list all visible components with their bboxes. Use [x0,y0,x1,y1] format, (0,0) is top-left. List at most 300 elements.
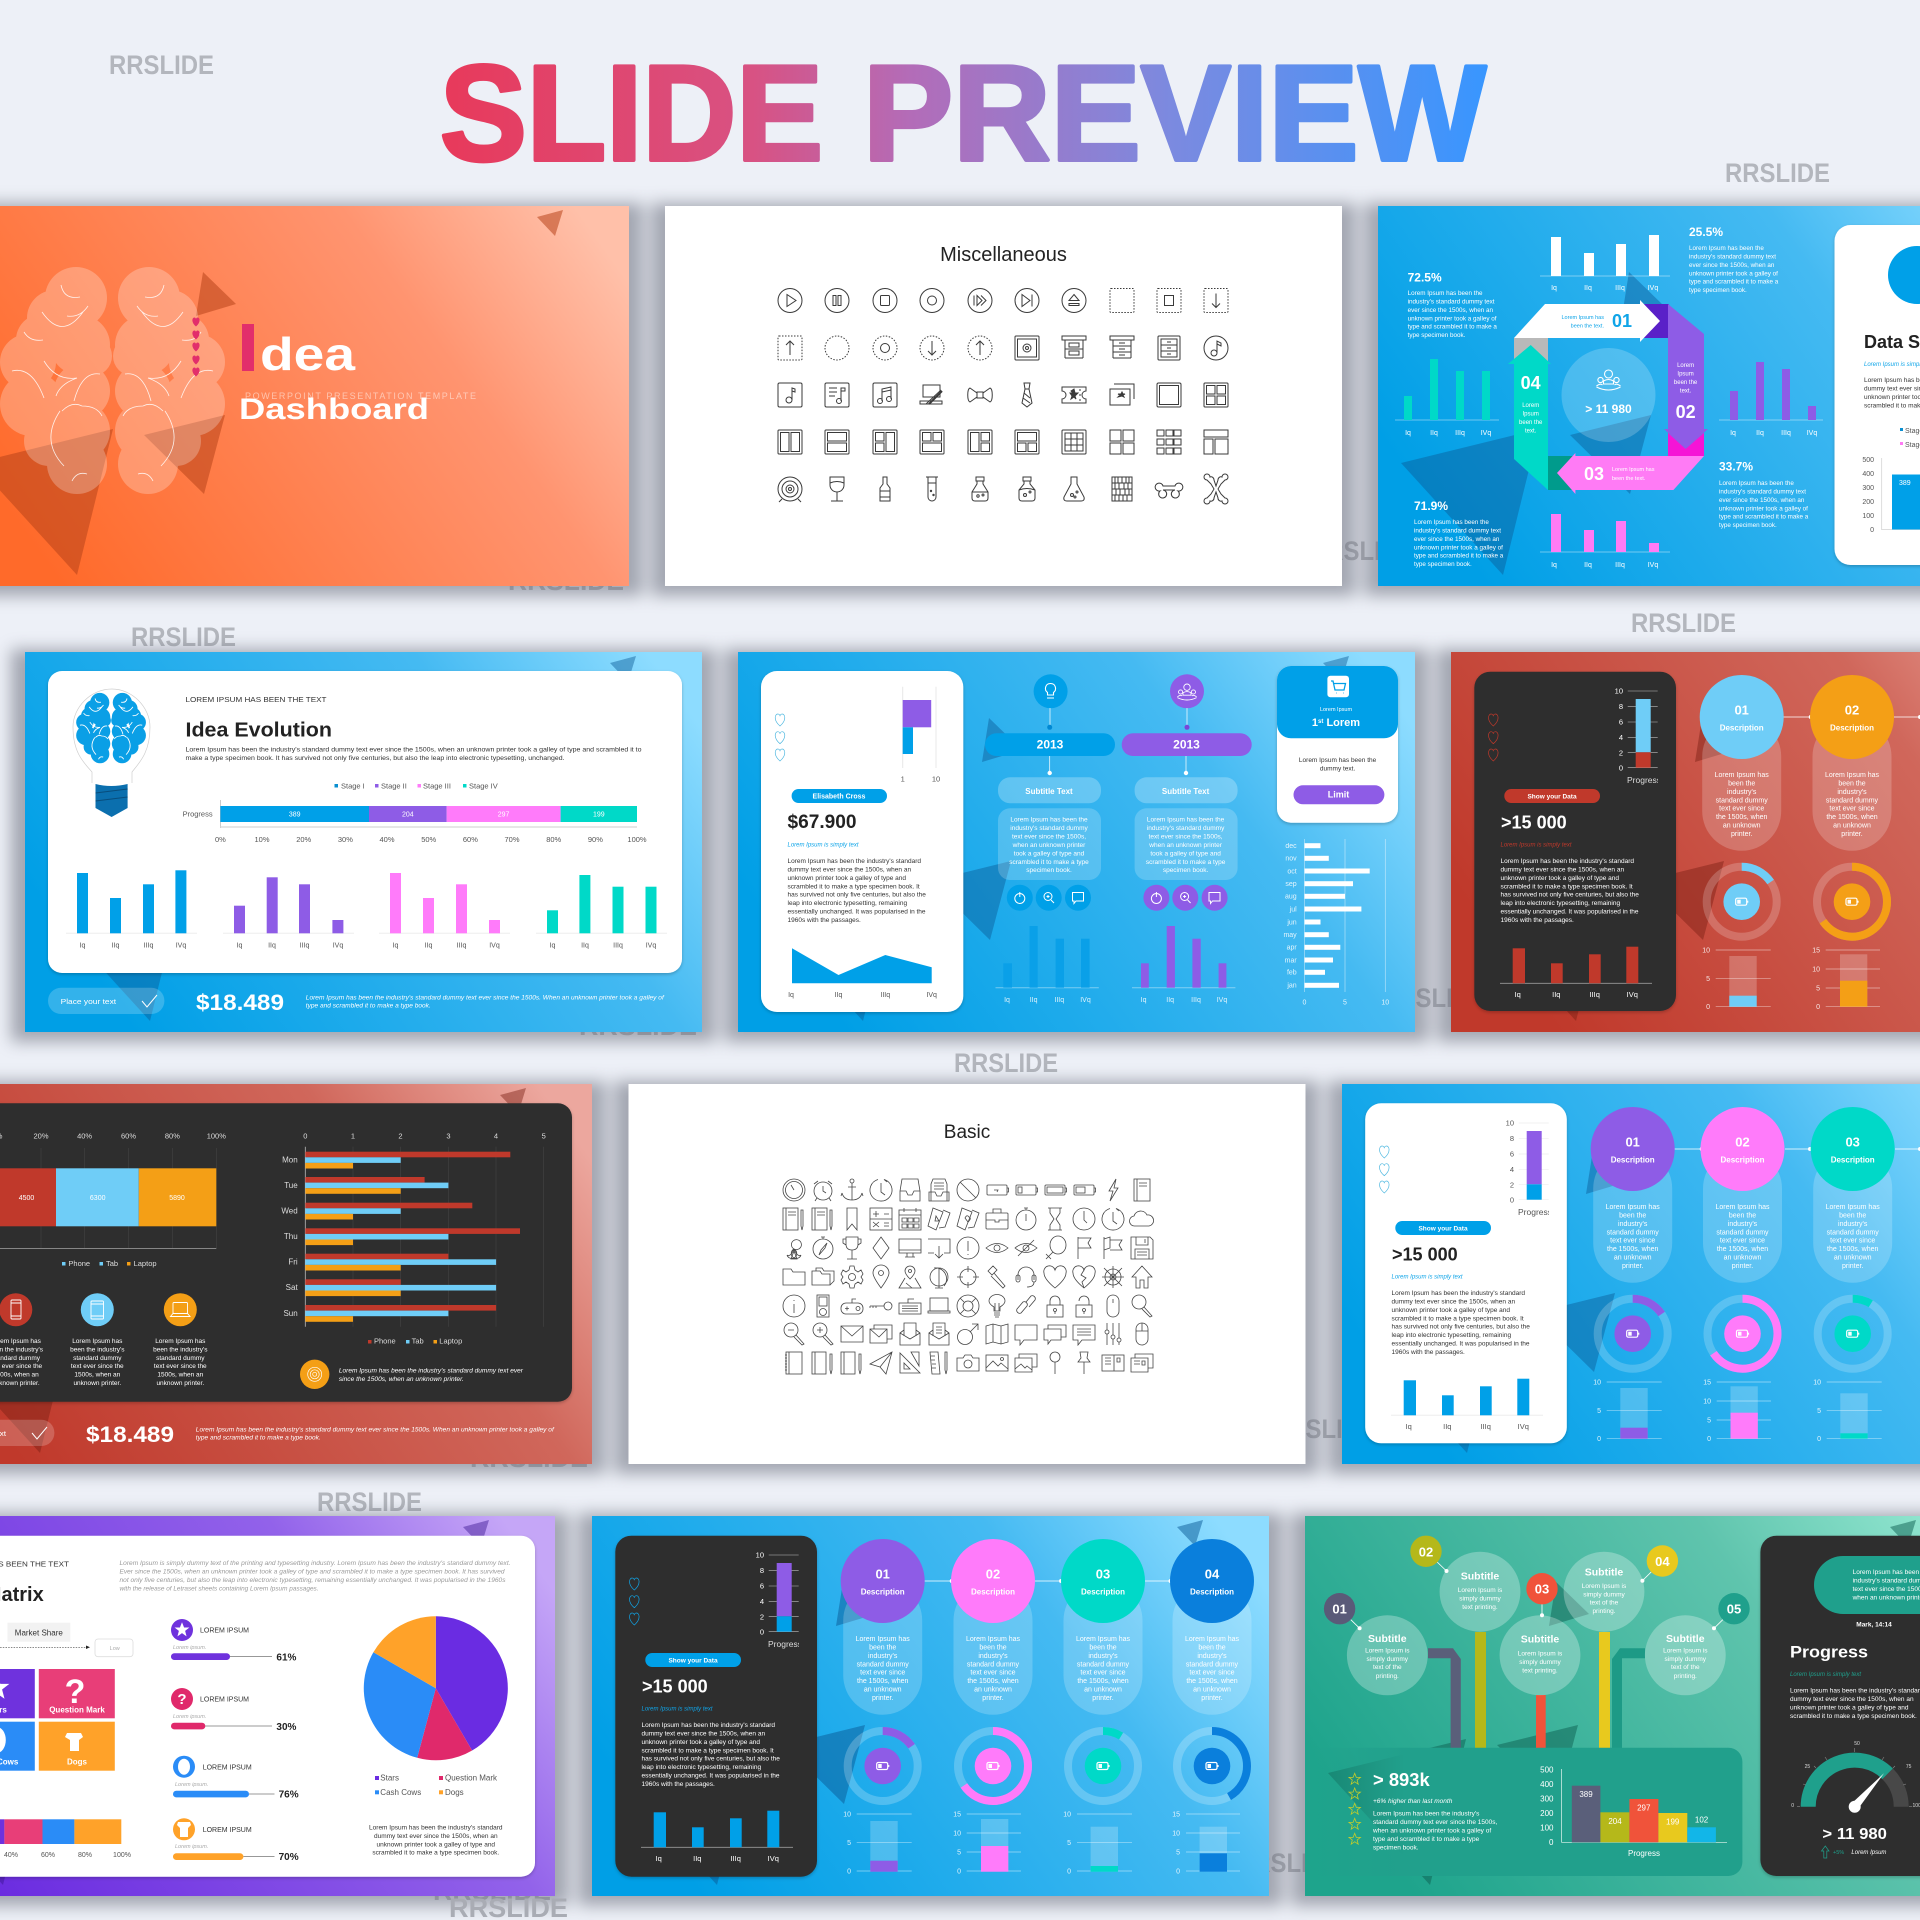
horizontal bar chart: week: Wed [281,1206,298,1216]
progress chart: 4 [760,1597,764,1606]
paragraph: scrambled it to make a type specimen book. It [1500,883,1633,890]
area chart: Iq [788,992,794,999]
step 02: been the [1838,780,1866,787]
bubble 04: simply dummy [1583,1591,1626,1598]
stacked progress bar: 80% [546,835,562,844]
stacked progress bar: 20% [296,835,312,844]
stat: 71.9%: industry's standard dummy text [1414,527,1501,534]
heading: Idea [242,324,356,371]
bar chart: pink [1540,514,1670,569]
bar chart: IVq [768,1854,779,1863]
step 03: 5 [1817,1408,1821,1415]
paragraph: scrambled it to make a type specimen book. It [788,883,920,890]
slide: green progress [1305,1516,1920,1896]
gauge: 0 [1791,1803,1794,1809]
legend: Laptop [134,1259,157,1268]
step 02: printer. [982,1695,1004,1702]
area chart: IIq [835,992,842,999]
bar chart: purple: Iq [1730,430,1736,437]
paragraph: leap into electronic typesetting, remaining [1500,900,1620,907]
arrow 04: text. [1525,428,1537,434]
metric: 76% [173,1756,299,1801]
bubble 03: 03 [1535,1582,1549,1597]
step 03: 10 [1063,1812,1071,1818]
bubble 03 [1500,1573,1580,1695]
bar chart: purple: IIIq [300,942,309,950]
description [186,746,642,762]
metric: 30%: LOREM IPSUM [200,1697,249,1704]
stars [1349,1773,1360,1844]
stacked chart: 4500 [19,1195,34,1202]
bar chart: pink: Iq [393,942,399,950]
stat: 71.9%: Lorem Ipsum has been the [1414,519,1489,526]
panel: dark card [1474,672,1676,1011]
metric: 61%: Lorem ipsum. [173,1645,206,1651]
paragraph: leap into electronic typesetting, remaining [1392,1332,1511,1339]
step 02: 10 [953,1830,961,1838]
bar chart: teal: IIIq [1455,430,1465,437]
paragraph: dummy text ever since the 1500s, when an [1500,866,1624,873]
horizontal bar chart: week: 1 [351,1132,355,1141]
stacked progress bar: 60% [463,835,478,844]
step 03: 5 [1067,1840,1071,1847]
step 02: Lorem Ipsum has [1715,1204,1770,1211]
step 01: an unknown [1614,1255,1652,1262]
pill: place your text: Place your text [61,997,117,1006]
stat: 71.9% [1414,499,1504,568]
progress chart: 4 [1510,1165,1514,1174]
note [339,1368,524,1383]
horizontal bar chart: months: aug [1285,894,1297,901]
step 03: industry's [1088,1653,1118,1660]
horizontal bar chart: months: jan [1286,983,1297,990]
heading: Idea: dea [260,328,355,380]
step 02: 15 [1812,948,1820,954]
metric: 70%: LOREM IPSUM [203,1827,252,1834]
stat: 71.9%: 71.9% [1414,499,1448,513]
subtitle text: POWERPOINT PRESENTATION TEMPLATE [245,391,476,401]
paragraph: dummy text ever since the 1500s, when an [642,1730,765,1737]
bubble 02 [1410,1536,1520,1632]
stacked progress bar: 70% [504,835,520,844]
paragraph: scrambled it to make a type specimen book. [1790,1713,1917,1720]
step 03: standard dummy [1077,1661,1130,1668]
step 01: the 1500s, when [857,1678,908,1685]
connector line [1783,715,1920,719]
paragraph: scrambled it to make a type specimen book. It [1392,1315,1524,1322]
arrow 02 [1644,304,1708,456]
horizontal bar chart: months: jun [1286,919,1297,926]
sub text: Lorem Ipsum is simply text [1500,842,1572,848]
step 02: 10 [1812,966,1820,974]
stat: 72.5%: Lorem Ipsum has been the [1408,290,1483,297]
gauge [1791,1741,1920,1813]
pill: show your data [645,1653,741,1667]
watermarks: RRSLIDE [1271,1414,1376,1444]
step 02: printer. [1732,1263,1753,1270]
stat: 11 980: > 11 980 [1822,1826,1887,1843]
slide: BCG matrix purple [0,1516,555,1896]
step 01: standard dummy [1716,797,1768,804]
step 02: an unknown [1724,1255,1761,1262]
progress chart [1506,1118,1552,1217]
step 01: an unknown [1723,823,1761,830]
horizontal bar chart: week: Fri [288,1258,298,1266]
bubble 01: text of the [1373,1664,1402,1671]
metric: 30% [171,1688,297,1733]
hearts [630,1578,639,1625]
note: Lorem Ipsum has been the industry's standard dummy text ever [339,1368,524,1374]
stacked progress bar: 90% [588,835,603,844]
metric: 30%: Lorem ipsum. [173,1714,206,1720]
paragraph: 1960s with the passages. [1500,917,1574,924]
bar chart: purple: IVq [1807,430,1817,437]
device text: unknown printer. [73,1380,121,1387]
step 03: standard dummy [1827,1229,1879,1236]
bar chart: 204 [1608,1817,1622,1826]
paragraph: dummy text ever since the 1500s, when an [374,1833,498,1840]
slide: timeline blue [738,652,1415,1032]
bubble 05: simply dummy [1665,1656,1707,1663]
step 02: been the [979,1644,1007,1651]
sub text: Lorem Ipsum is simply text [642,1706,713,1712]
heading: Basic: Basic [944,1122,990,1143]
paragraph: 1960s with the passages. [1392,1349,1465,1356]
stat: 25.5%: 25.5% [1689,225,1723,239]
step 01: 10 [1593,1380,1601,1386]
column: 2013 purple: industry's standard dummy [1147,825,1225,832]
panel: white card [0,1536,535,1877]
axis labels: Market Share [15,1628,63,1638]
horizontal bar chart: week: Sat [286,1283,298,1292]
bubble 05: text of the [1671,1664,1700,1671]
step 01: 5 [1706,976,1710,983]
progress chart: 0 [1619,764,1623,772]
watermarks: RRSLIDE [433,1876,551,1906]
icon: brain [0,267,225,494]
axis labels [0,1623,133,1657]
bubble 02: Lorem Ipsum is [1458,1587,1503,1594]
arrow 03: Lorem Ipsum has [1612,467,1655,473]
stat: 71.9%: type and scrambled it to make a [1414,553,1504,560]
chart circle [1888,246,1920,304]
step 01: 0 [1706,1004,1710,1011]
step 01 [841,1539,925,1876]
horizontal bar chart: months: nov [1285,856,1297,863]
paragraph: scrambled it to make a type specimen book. [372,1850,499,1857]
stat note [1822,1846,1886,1858]
step 04: 04 [1205,1566,1220,1581]
step 02: text ever since [970,1670,1016,1677]
step 02: text ever since [1720,1238,1765,1245]
paragraph: standard dummy text ever since the 1500s, [1373,1819,1497,1826]
step 02: industry's [978,1653,1008,1660]
progress chart: 2 [1510,1180,1514,1189]
stacked progress bar: Progress [183,810,213,818]
step 01: Lorem Ipsum has [856,1636,910,1643]
stacked progress bar: 40% [379,835,395,844]
stat note: Lorem Ipsum [1851,1850,1886,1856]
slide: Idea Dashboard cover [0,206,629,586]
device text: Lorem Ipsum has [155,1338,206,1345]
column: 2013 blue: IVq [1080,997,1091,1004]
arrow 02: been the [1674,380,1698,386]
heading: Progress: Progress [1790,1643,1868,1662]
bar chart: IIIq [1480,1422,1491,1431]
progress chart: 8 [1510,1134,1514,1143]
stacked progress bar: 30% [338,835,353,844]
bar chart: pink: IIIq [1615,562,1625,569]
bubble 04 [1564,1545,1678,1632]
metric: 70%: Lorem ipsum. [175,1844,208,1850]
step 04: 15 [1172,1812,1180,1818]
stat: 33.7%: industry's standard dummy text [1719,488,1806,495]
title: SLIDE [440,37,823,189]
step 01: Description [861,1587,905,1596]
step 01: printer. [1622,1263,1643,1270]
legend [334,782,498,790]
paragraph: leap into electronic typesetting, remaining [642,1764,761,1771]
bar chart: 400 [1540,1780,1554,1789]
pill: name: Elisabeth Cross [813,794,866,800]
step 04: 0 [1176,1868,1180,1876]
legend [368,1337,462,1346]
step 04 [1170,1539,1254,1876]
pill: place your text [0,1420,54,1446]
step 03: the 1500s, when [1077,1678,1129,1685]
step 03: been the [1839,1212,1866,1219]
step 02: industry's [1837,789,1867,796]
step 03: industry's [1838,1221,1868,1228]
paragraph: essentially unchanged. It was popularised in the [788,909,926,916]
slide: Idea Evolution [25,652,702,1032]
step 02: standard dummy [967,1661,1020,1668]
step 02: 0 [1707,1436,1711,1443]
horizontal bar chart: week: 3 [446,1132,450,1141]
sub text: Lorem Ipsum is simply text [788,842,859,848]
column: 2013 blue: IIIq [1054,997,1064,1004]
step 01: industry's [1618,1221,1648,1228]
slide: blue steps white card [1342,1084,1920,1464]
bar chart: IIIq [1589,990,1600,999]
step 01: been the [1728,780,1755,787]
footer note: type and scrambled it to make a type book. [196,1436,321,1442]
paragraph: unknown printer took a galley of type and [1392,1307,1510,1314]
panel: bottom stats [1305,1748,1742,1876]
stacked chart: 5890 [169,1195,185,1202]
step 04: 10 [1172,1830,1180,1838]
legend: Phone [374,1337,396,1346]
panel: main card [48,671,682,973]
stacked chart: 100% [207,1132,226,1141]
bubble 02: 02 [1419,1544,1433,1559]
step 02: 5 [957,1850,961,1856]
step 01: Lorem Ipsum has [1606,1204,1660,1211]
horizontal bar chart: week: Sun [283,1309,298,1318]
bubble 01: 01 [1332,1602,1347,1617]
stacked chart [0,1132,226,1248]
bubble 04: Lorem Ipsum is [1582,1583,1627,1590]
device text: text ever since the [154,1363,207,1370]
stacked bar: 60% [41,1852,55,1859]
paragraph: Lorem Ipsum has been the industry's standard [1790,1688,1920,1694]
column: 2013 purple: when an unknown printer [1148,842,1223,849]
watermarks: RRSLIDE [1631,608,1736,638]
paragraph: scrambled it to make a type specimen book. It [642,1747,774,1754]
paragraph: 1960s with the passages. [642,1781,715,1788]
bar chart: 500 [1540,1766,1554,1774]
matrix [0,1669,115,1771]
step 01: text ever since [860,1670,905,1677]
progress chart: Progress [1627,775,1661,785]
step 02: 02 [1845,702,1859,717]
progress chart: 0 [760,1628,764,1636]
panel: white card [1365,1103,1567,1443]
step 01: Description [1611,1155,1655,1164]
paragraph: Lorem Ipsum has been the industry's standard [1500,858,1634,865]
bubble 03: simply dummy [1519,1659,1562,1666]
progress chart: 0 [1510,1196,1514,1204]
progress chart: 6 [1510,1150,1514,1158]
bubble 05: Subtitle [1666,1633,1705,1645]
step 02: the 1500s, when [1717,1246,1768,1253]
bar chart: Iq [1406,1422,1412,1431]
slide: Basic icons [628,1084,1306,1464]
device text: standard dummy [73,1355,122,1362]
pill: show your data [1395,1221,1491,1235]
bar chart: teal: IIq [1430,430,1438,437]
stacked bar chart: 0 [1870,527,1874,534]
column: 2013 blue: scrambled it to make a type [1009,859,1089,866]
step 02: Lorem Ipsum has [1825,772,1880,779]
step 02: 5 [1707,1418,1711,1424]
stat: 25.5%: Lorem Ipsum has been the [1689,245,1764,252]
step 01: 01 [1625,1134,1640,1149]
matrix: Question Mark [49,1705,105,1714]
pill: show your data: Show your Data [1418,1225,1468,1232]
paragraph: leap into electronic typesetting, remaining [788,900,907,907]
metric: 61%: 61% [276,1653,297,1664]
connector lines [924,1579,1172,1583]
watermarks: RRSLIDE [508,566,624,596]
note: since the 1500s, when an unknown printer. [339,1377,464,1383]
description: make a type specimen book. It has survived not only five centuries, but also the leap into electronic typesetting, unchanged. [186,755,565,762]
column: 2013 purple: Iq [1141,997,1147,1004]
bubble 01: Subtitle [1368,1633,1407,1645]
step 01: standard dummy [857,1661,909,1668]
stacked progress bar: 10% [254,835,270,844]
horizontal bar chart: week: Thu [284,1232,298,1241]
panel: price card: 1 [1312,717,1318,729]
pie legend: Cash Cows [380,1788,421,1797]
step 01: been the [869,1644,896,1651]
stat: 71.9%: type specimen book. [1414,561,1472,568]
step 02: Lorem Ipsum has [966,1636,1021,1643]
legend [1900,428,1920,449]
step 01: 5 [1597,1408,1601,1415]
step 04: printer. [1201,1695,1223,1702]
step 01: the 1500s, when [1716,814,1767,821]
device text: text ever since the [71,1363,124,1370]
bubble 05: Lorem Ipsum is [1663,1648,1708,1654]
watermarks: RRSLIDE [317,1487,422,1517]
step 02: Description [1720,1155,1765,1164]
intro text [120,1561,510,1592]
card text [1864,362,1920,409]
progress chart: 10 [1615,686,1623,696]
step 03: been the [1089,1644,1117,1651]
column: 2013 blue: Subtitle Text [1025,787,1073,796]
step 02 [951,1539,1035,1876]
paragraph: unknown printer took a galley of type and [1500,875,1619,882]
step 01 [1591,1107,1675,1443]
bar chart: blue: IIq [112,942,119,950]
step 04: 5 [1176,1850,1180,1856]
progress chart [756,1550,802,1649]
arrow 02: 02 [1676,402,1696,422]
column: 2013 blue: 2013 [1037,738,1064,752]
title [440,37,1487,189]
stat: 25.5% [1689,225,1779,294]
paragraph: essentially unchanged. It was popularised in the [642,1773,780,1780]
bar chart: purple [223,877,354,950]
watermarks: RRSLIDE [579,1011,697,1041]
heading: Miscellaneous: Miscellaneous [940,244,1067,266]
stat: 25.5%: ever since the 1500s, when an [1689,262,1775,269]
legend: Stage III [423,782,451,790]
footer note [196,1427,555,1442]
metric: 76%: Lorem ipsum. [175,1782,208,1788]
bar chart: blue: Iq [80,942,86,950]
arrow 03 [1557,453,1704,494]
paragraph: Lorem Ipsum has been the industry's standard [369,1824,503,1831]
stat: 25.5%: type specimen book. [1689,287,1747,294]
column: 2013 purple: took a galley of type and [1150,850,1221,857]
progress chart: 8 [760,1566,764,1575]
step 03: Lorem Ipsum has [1826,1204,1880,1211]
step 01: Description [1720,723,1764,732]
pie legend [375,1774,498,1797]
step 03: 0 [1067,1868,1071,1876]
arrow 04: 04 [1521,373,1541,393]
stat: >15 000 [642,1676,708,1696]
step 02: standard dummy [1826,797,1879,804]
stacked chart: 6300 [90,1195,106,1202]
bubble 03: Lorem Ipsum is [1518,1650,1563,1658]
paragraph: essentially unchanged. It was popularised in the [1392,1341,1530,1348]
intro text: with the release of Letraset sheets containing Lorem Ipsum passages. [120,1586,318,1592]
icon grid [778,288,1228,504]
stacked bar: 40% [4,1852,18,1859]
column: 2013 blue: Iq [1004,997,1010,1004]
step 03: Lorem Ipsum has [1076,1636,1131,1643]
arrow 01: been the text. [1571,324,1604,330]
watermarks: RRSLIDE [470,1443,588,1473]
step 03: text ever since [1830,1238,1875,1245]
center circle [1562,348,1656,442]
bar chart: 199 [1666,1817,1680,1826]
horizontal bar chart: week: 4 [494,1132,498,1141]
step 02: 0 [1816,1004,1820,1011]
column: 2013 blue: took a galley of type and [1014,850,1085,857]
bubble 02: text printing. [1462,1604,1498,1611]
bar chart: 297 [1637,1804,1651,1813]
stat: 71.9%: ever since the 1500s, when an [1414,536,1500,543]
bar chart: white: IIIq [1615,285,1625,292]
step 01: 10 [843,1812,851,1818]
area chart [788,948,937,999]
horizontal bar chart: months: apr [1287,945,1297,952]
